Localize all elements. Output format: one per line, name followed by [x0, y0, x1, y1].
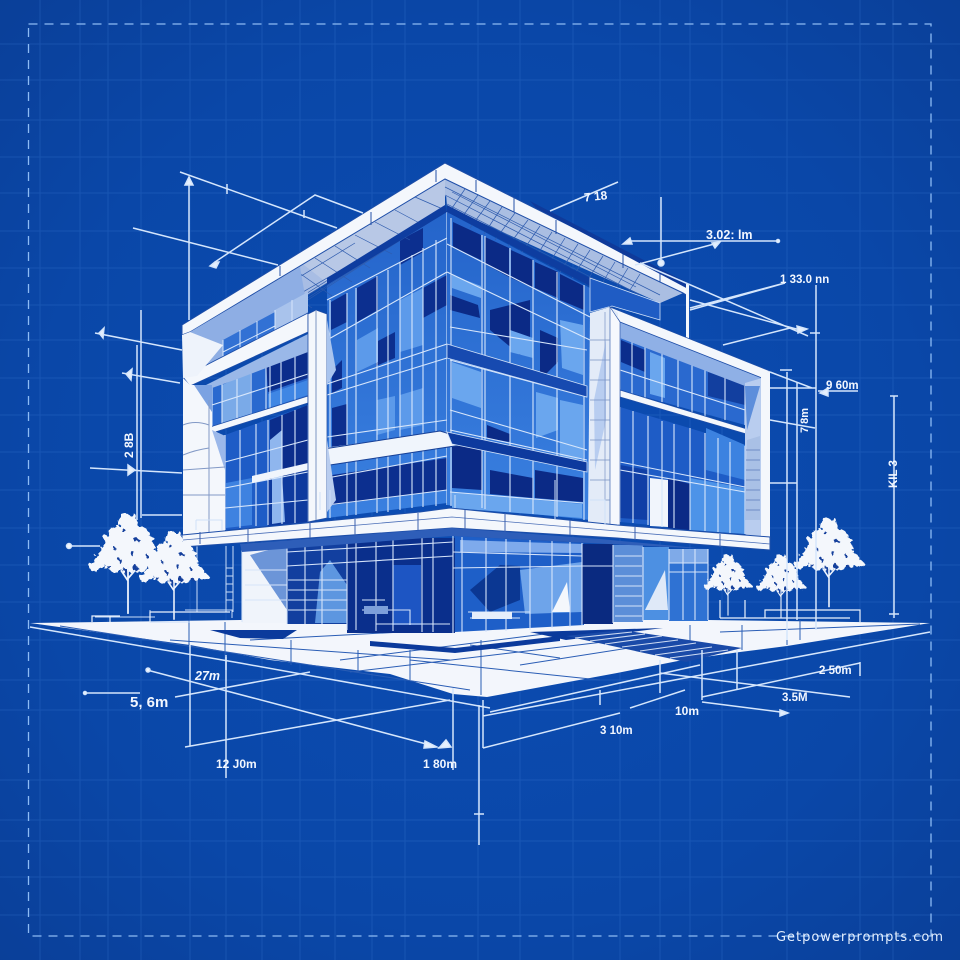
- bright lobby glass: [455, 536, 584, 632]
- roof back edge strip: [530, 201, 690, 290]
- dark top panes: [450, 222, 584, 502]
- light panes: [357, 288, 423, 435]
- ground floor: [242, 536, 708, 633]
- left service bay: [95, 545, 233, 622]
- label: right: 1 33.0 nn: [780, 274, 829, 286]
- tree: middle right: [757, 554, 805, 618]
- left wall with louvre shading: [242, 545, 288, 623]
- label: vertical right small: 7 8m: [799, 408, 811, 433]
- roof soffit: [190, 179, 683, 345]
- stair grating: [566, 630, 742, 662]
- reflection panes: [452, 275, 583, 518]
- mid beam: [620, 390, 760, 438]
- left pillar: [308, 310, 336, 522]
- label: lower left: 12 J0m: [216, 757, 257, 771]
- right pillar: [588, 307, 620, 528]
- soffit hatching: [205, 187, 660, 340]
- tree: large left: [89, 513, 167, 614]
- label: vertical far right: KIL 3: [888, 460, 900, 488]
- roof fascia: [182, 163, 690, 344]
- beam 1: [183, 313, 308, 386]
- balcony slab center: [317, 431, 470, 465]
- label: 35m: 3.5M: [782, 692, 808, 704]
- right wing: [610, 307, 770, 550]
- lower glass: [620, 407, 745, 534]
- platform: [30, 620, 930, 697]
- mullions: [327, 212, 447, 518]
- soffit under beam: [620, 322, 762, 386]
- dark eave line under soffit: [447, 205, 660, 303]
- left wing: [183, 267, 308, 530]
- label top: 7 18: [583, 188, 608, 205]
- platform paving lines: [60, 620, 920, 695]
- main slab: [182, 508, 770, 552]
- top-left dimensions: [133, 172, 363, 320]
- thick floor band: [447, 344, 587, 397]
- trees: [89, 513, 864, 620]
- tree: small left: [140, 531, 208, 620]
- top-right dimensions: [550, 182, 808, 345]
- entrance door: [582, 544, 613, 624]
- white beam 2: [252, 463, 308, 483]
- dark lobby: [347, 538, 455, 633]
- label: bottom left: 5, 6m: [130, 694, 168, 711]
- central glass: right face: [447, 212, 590, 520]
- dimension labels: [122, 188, 900, 771]
- tree: small right: [704, 554, 752, 616]
- beam 3: [210, 396, 308, 433]
- label: middle right: 9 60m: [826, 380, 859, 392]
- upper-right recess below soffit: [590, 278, 660, 320]
- label: upper right: 3.02: lm: [706, 228, 753, 242]
- right dimensions: [770, 285, 899, 640]
- right end wall: [745, 371, 770, 550]
- left dimensions: [66, 310, 182, 548]
- dark panes: [331, 228, 447, 505]
- louvre panels: [613, 545, 643, 622]
- dimension lines: [30, 172, 930, 845]
- upper glass row: [212, 345, 308, 428]
- beam top: [610, 307, 770, 378]
- ground floor mullions: [242, 536, 708, 633]
- lobby furniture: [472, 612, 512, 619]
- watermark: Getpowerprompts.com: [776, 930, 943, 945]
- site railings: [92, 600, 860, 622]
- label: vertical left: 2 8B: [122, 432, 136, 458]
- upper glass: [620, 337, 745, 425]
- tree: tall right: [794, 517, 864, 607]
- label: 250m: 2 50m: [819, 665, 852, 677]
- bottom dimensions: [30, 627, 930, 845]
- label: lower center: 1 80m: [423, 757, 457, 771]
- dark edge under terrace: [370, 636, 560, 653]
- central glass: left face: [327, 212, 447, 518]
- dark steps left: [210, 630, 297, 639]
- label: 10m: 10m: [675, 704, 699, 718]
- glass left section: [287, 540, 347, 624]
- mullions: [447, 218, 590, 520]
- terrace balcony rails: [196, 480, 605, 530]
- label: small: 27m: [194, 669, 220, 683]
- lower glass row: [225, 405, 308, 530]
- label: center: 3 10m: [600, 725, 633, 737]
- left end wall: [182, 332, 225, 536]
- upper recess: [190, 267, 308, 380]
